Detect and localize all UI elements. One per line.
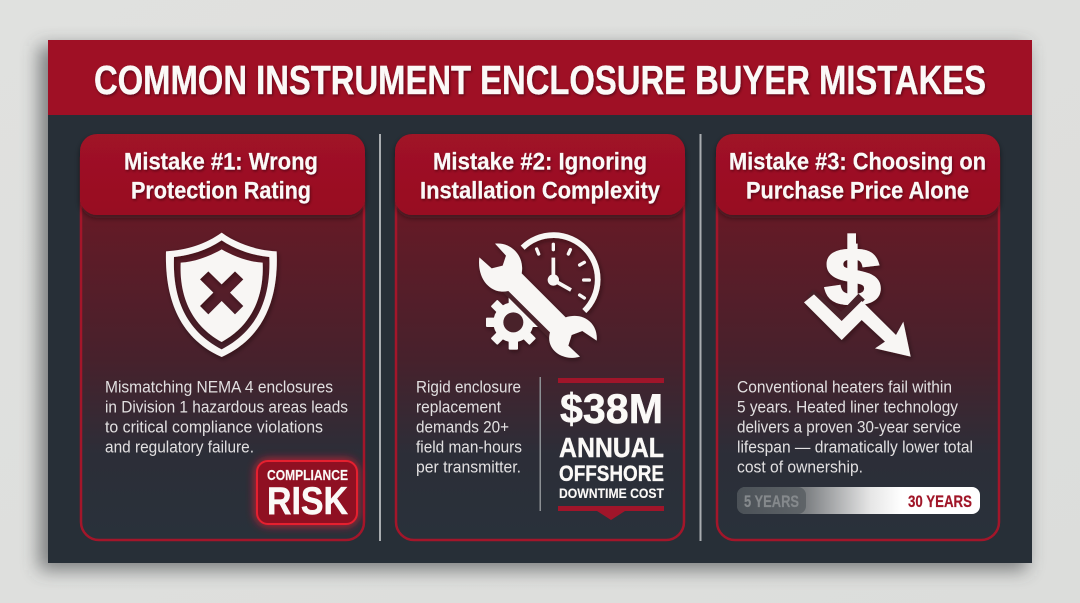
lifespan comparison bar: [737, 487, 980, 514]
body text: mistake 1: to critical compliance violations: [105, 418, 323, 436]
heading banner: mistake 1: Protection Rating: [131, 178, 311, 204]
callout: compliance risk badge: COMPLIANCE: [267, 467, 348, 484]
heading banner: mistake 1: [80, 134, 365, 215]
body text: mistake 1: [105, 378, 348, 456]
body text: mistake 2: Rigid enclosure: [416, 378, 521, 396]
lifespan comparison bar: 30 YEARS: [908, 492, 972, 511]
body text: mistake 2: replacement: [416, 398, 501, 416]
heading banner: mistake 3: Purchase Price Alone: [746, 178, 969, 204]
panel: mistake 1: [80, 134, 365, 540]
callout: compliance risk badge: [256, 460, 358, 525]
callout: $38M downtime stat: OFFSHORE: [559, 461, 664, 486]
body text: mistake 3: Conventional heaters fail within: [737, 378, 952, 396]
heading banner: mistake 1: Mistake #1: Wrong: [124, 148, 318, 176]
body text: mistake 1: Mismatching NEMA 4 enclosures: [105, 378, 333, 396]
body text: mistake 3: [737, 378, 973, 476]
body text: mistake 2: [416, 378, 522, 476]
title banner: [48, 40, 1032, 115]
body text: mistake 2: demands 20+: [416, 418, 509, 436]
body text: mistake 3: cost of ownership.: [737, 458, 863, 476]
main panel: [48, 40, 1032, 563]
column divider 2: [700, 134, 702, 541]
icon: wrench, gear and clock: [479, 235, 598, 358]
body text: mistake 1: and regulatory failure.: [105, 438, 254, 456]
icon: dollar with falling arrow: [804, 232, 911, 357]
panel shadow: [39, 46, 1027, 570]
callout: $38M downtime stat: ANNUAL: [559, 432, 664, 463]
body text: mistake 3: lifespan — dramatically lower total: [737, 438, 973, 456]
callout: $38M downtime stat: DOWNTIME COST: [559, 485, 664, 501]
heading banner: mistake 2: Installation Complexity: [420, 178, 661, 204]
callout: $38M downtime stat: [558, 378, 664, 520]
panel: mistake 2: [395, 134, 685, 540]
callout: $38M downtime stat: $38M: [560, 385, 663, 432]
heading banner: mistake 2: [395, 134, 685, 215]
heading banner: mistake 2: Mistake #2: Ignoring: [433, 148, 647, 176]
body text: mistake 3: 5 years. Heated liner technology: [737, 398, 959, 416]
body text: mistake 2: per transmitter.: [416, 458, 521, 476]
lifespan comparison bar: 5 YEARS: [744, 492, 799, 511]
column divider 1: [379, 134, 381, 541]
callout: compliance risk badge: RISK: [267, 480, 348, 523]
body text: mistake 2: field man-hours: [416, 438, 522, 456]
heading banner: mistake 3: [716, 134, 1000, 215]
inner divider: [540, 377, 541, 511]
body text: mistake 3: delivers a proven 30-year service: [737, 418, 961, 436]
heading banner: mistake 3: Mistake #3: Choosing on: [729, 148, 986, 176]
icon: shield with X: [166, 233, 277, 357]
panel: mistake 3: [716, 134, 1000, 540]
icon: dollar with falling arrow: $: [825, 232, 880, 321]
body text: mistake 1: in Division 1 hazardous areas leads: [105, 398, 348, 416]
